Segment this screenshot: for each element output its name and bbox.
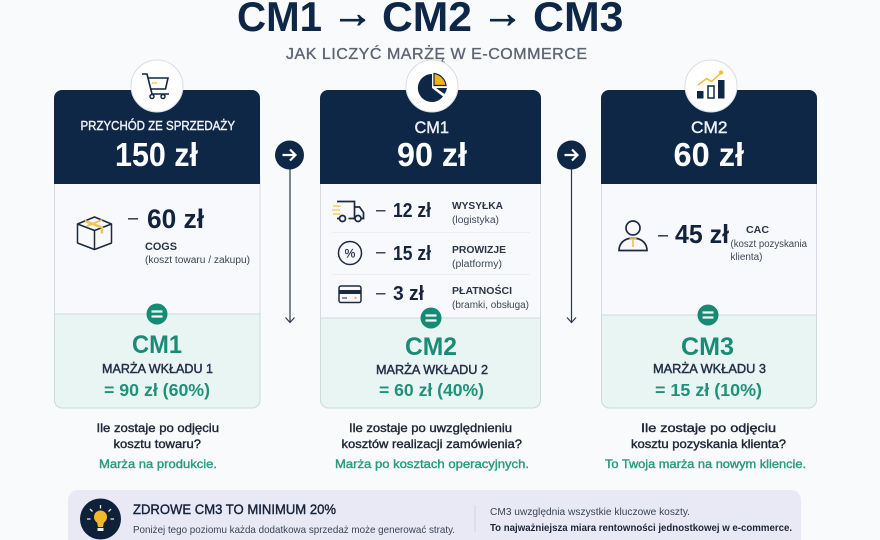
panel 2 result background	[320, 318, 540, 408]
icon: truck	[332, 202, 364, 222]
panel 2 caption: kosztów realizacji zamówienia?	[342, 437, 522, 451]
cost: minus 45: 45 zł	[675, 219, 730, 249]
panel 2 header value: 90 zł	[397, 136, 467, 173]
panel 3 caption	[605, 421, 806, 471]
CM3 result	[653, 333, 766, 400]
row: payments: (bramki, obsługa)	[452, 300, 529, 311]
cost label: COGS: COGS	[145, 241, 177, 253]
CM1 result: CM1	[132, 331, 182, 359]
row: commissions: 15 zł	[393, 242, 431, 265]
row: shipping	[332, 199, 503, 226]
CM2 result: CM2	[405, 333, 457, 361]
row: payments	[339, 282, 529, 311]
arrow: panel 2 to panel 3	[557, 140, 586, 322]
panel 2 caption: Marża po kosztach operacyjnych.	[335, 457, 529, 471]
row: shipping: WYSYŁKA	[452, 200, 503, 212]
CM2 result: = 60 zł (40%)	[379, 380, 484, 400]
cost label: CAC: klienta)	[730, 252, 762, 263]
row: commissions	[338, 242, 506, 270]
equals badge	[420, 308, 442, 328]
panel 2 icon: pie chart	[406, 60, 458, 112]
cost label: CAC	[730, 224, 807, 263]
panel 1 caption: Ile zostaje po odjęciu	[96, 421, 219, 435]
panel 3 header label: CM2	[691, 118, 728, 137]
panel 3 caption: To Twoja marża na nowym kliencie.	[605, 457, 806, 471]
cost: minus 60: 60 zł	[147, 204, 205, 234]
panel 1 header value: 150 zł	[115, 136, 198, 173]
cost label: COGS	[145, 241, 250, 266]
CM2 result	[376, 333, 488, 400]
panel 3 icon: growth chart	[685, 60, 737, 112]
row: shipping: (logistyka)	[452, 215, 499, 226]
CM2 result: MARŻA WKŁADU 2	[376, 363, 488, 377]
panel 1 caption: kosztu towaru?	[114, 437, 201, 451]
title	[237, 0, 624, 40]
row: commissions: (platformy)	[452, 259, 502, 270]
panel 3 body	[602, 170, 816, 408]
panel 1 caption: Marża na produkcie.	[99, 457, 217, 471]
panel 1 body	[54, 170, 260, 408]
row: commissions: PROWIZJE	[452, 244, 506, 256]
equals badge	[146, 304, 168, 324]
panel 1 result background	[54, 314, 260, 408]
panel 2 caption	[335, 421, 529, 471]
icon: percent: %	[345, 246, 356, 260]
panel 3 caption: kosztu pozyskania klienta?	[631, 437, 786, 451]
callout warning text: Poniżej tego poziomu każda dodatkowa sprzedaż może generować straty.	[133, 524, 455, 536]
cost label: CAC: (koszt pozyskania	[730, 239, 807, 250]
CM3 result: MARŻA WKŁADU 3	[653, 362, 766, 376]
CM1 result: MARŻA WKŁADU 1	[102, 362, 213, 376]
panel 2 header	[320, 90, 541, 184]
row: payments: PŁATNOŚCI	[452, 284, 512, 297]
callout note: CM3 uwzględnia wszystkie kluczowe koszty.	[490, 507, 690, 518]
callout heading: ZDROWE CM3 TO MINIMUM 20%	[133, 502, 336, 517]
panel 2 caption: Ile zostaje po uwzględnieniu	[349, 421, 512, 435]
panel 1 icon: shopping cart	[131, 60, 183, 112]
arrow: panel 1 to panel 2	[275, 140, 304, 322]
callout: healthy CM3	[68, 490, 801, 540]
icon: payment card	[339, 286, 361, 302]
subtitle: JAK LICZYĆ MARŻĘ W E-COMMERCE	[286, 44, 587, 63]
panel: CM2 to CM3	[601, 60, 817, 471]
panel 3 caption: Ile zostaje po odjęciu	[641, 421, 776, 435]
cost label: CAC: CAC	[746, 224, 769, 236]
panel: CM1 to CM2	[320, 60, 541, 471]
panel: revenue to CM1	[54, 60, 260, 471]
row: payments: 3 zł	[393, 282, 424, 305]
panel 1 header label: PRZYCHÓD ZE SPRZEDAŻY	[80, 118, 236, 133]
CM1 result: = 90 zł (60%)	[104, 380, 210, 400]
callout emphasis: To najważniejsza miara rentowności jednostkowej w e-commerce.	[490, 523, 792, 534]
icon: percent	[338, 242, 362, 264]
CM1 result	[102, 331, 213, 400]
panel 3 result background	[602, 315, 816, 408]
row: shipping: 12 zł	[393, 199, 431, 222]
cost label: COGS: (koszt towaru / zakupu)	[145, 255, 250, 266]
panel 3 header	[601, 90, 817, 184]
panel 3 header value: 60 zł	[674, 136, 744, 173]
icon: light bulb	[80, 498, 121, 540]
CM3 result: CM3	[681, 333, 734, 361]
callout background	[68, 490, 801, 540]
icon: box	[78, 217, 112, 250]
panel 2 header label: CM1	[414, 118, 449, 137]
panel 2 body	[320, 170, 540, 408]
equals badge	[698, 304, 718, 326]
icon: person	[619, 221, 647, 250]
CM3 result: = 15 zł (10%)	[655, 380, 762, 400]
panel 1 header	[54, 90, 260, 184]
panel 1 caption	[96, 421, 219, 471]
